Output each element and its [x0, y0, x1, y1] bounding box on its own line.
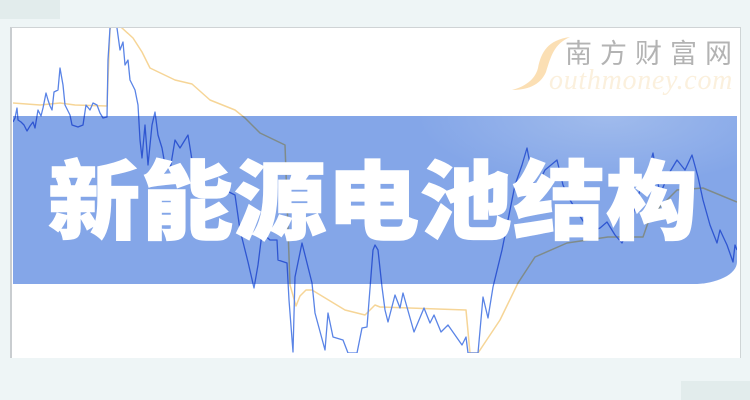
- logo mark: orange S swoosh: [512, 37, 570, 90]
- logo Chinese name: 南方财富网: [565, 39, 740, 69]
- stock line chart: [13, 28, 737, 353]
- corner patch: bottom right: [681, 381, 750, 400]
- title band: [13, 116, 737, 284]
- logo Latin name: outhmoney.com: [549, 65, 733, 96]
- corner patch: top left: [0, 0, 60, 19]
- title: 新能源电池结构: [48, 156, 699, 250]
- logo: southmoney: [512, 37, 740, 96]
